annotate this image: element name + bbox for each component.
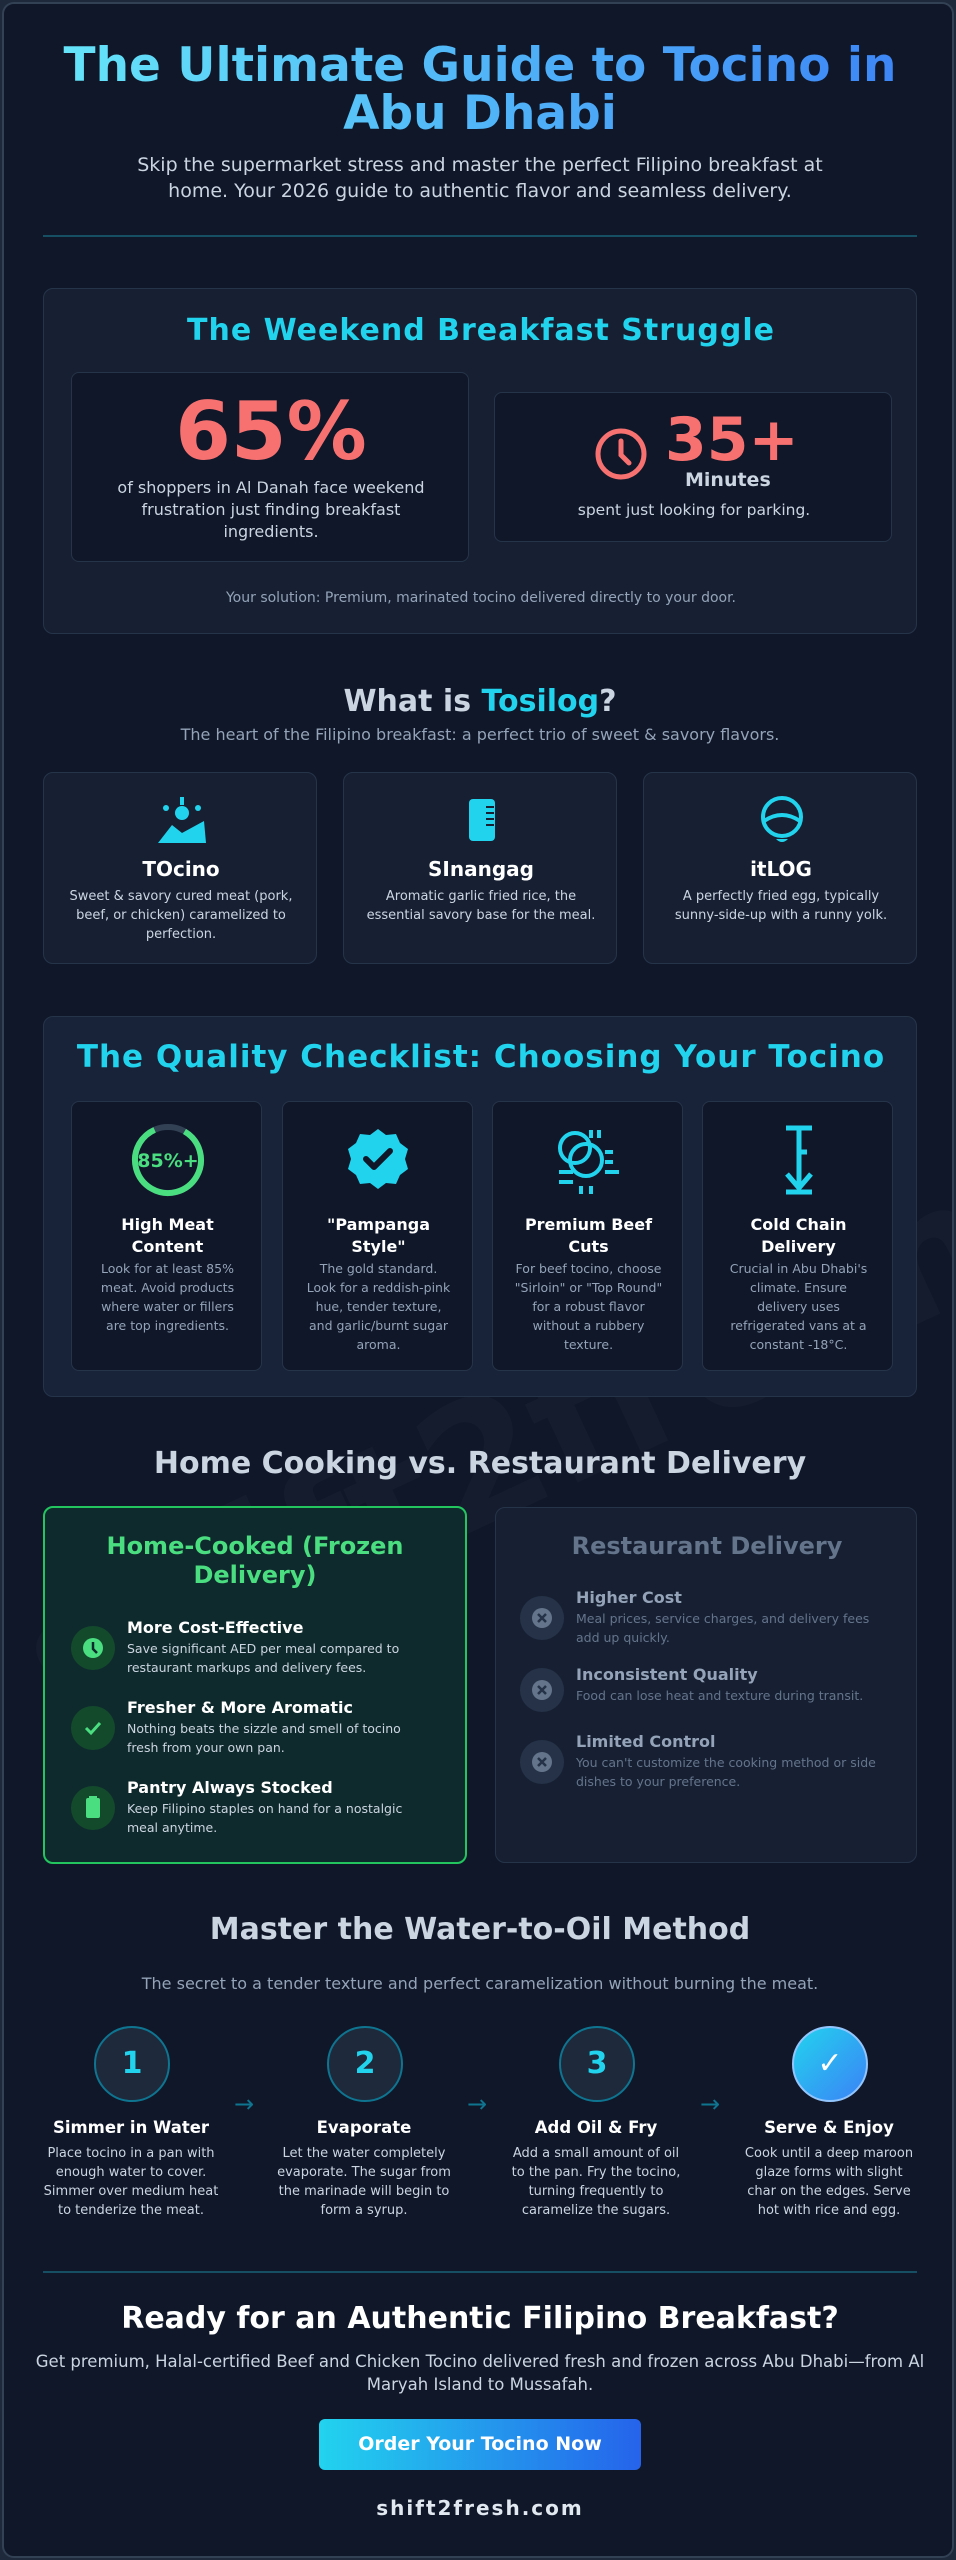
title: The Ultimate Guide to Tocino in [64,38,896,93]
card: high meat: Content [132,1237,203,1256]
button: order: Order Your Tocino Now [358,2433,602,2455]
card: high meat: High Meat [121,1215,214,1234]
item: pantry: Pantry Always Stocked [127,1778,333,1797]
step 3: 3 [587,2046,607,2081]
card: beef cuts: Premium Beef [525,1215,652,1234]
item: inconsistent: Food can lose heat and texture during transit. [576,1688,863,1703]
card: sinangag [343,772,617,964]
step 4: Cook until a deep maroon glaze forms with slight char on the edges. Serve hot with rice and egg. [745,2146,913,2218]
panel: home-cooked [43,1506,467,1864]
card: pampanga [282,1101,473,1371]
step 4 [745,2026,913,2218]
item: cost-effective: Save significant AED per meal compared to restaurant markups and delivery fees. [127,1641,399,1675]
item: inconsistent: Inconsistent Quality [576,1665,758,1684]
step 1 [44,2026,218,2218]
card: beef cuts [492,1101,683,1371]
heading: struggle: The Weekend Breakfast Struggle [187,313,775,348]
item: pantry [71,1778,402,1835]
card: tocino: Sweet & savory cured meat (pork, beef, or chicken) caramelized to perfection. [70,889,292,942]
heading: what is tosilog: What is Tosilog? [343,684,617,719]
panel: restaurant delivery: Restaurant Delivery [572,1532,842,1560]
step 2 [277,2026,451,2218]
card: high meat: Look for at least 85% meat. Avoid products where water or fillers are top ingredients. [101,1261,234,1333]
title: Abu Dhabi [343,86,617,141]
item: higher cost [520,1588,869,1645]
icon: rice [469,799,495,841]
step 3: Add Oil & Fry [535,2118,657,2137]
icon: cold arrow [785,1126,813,1194]
icon: egg [761,796,803,842]
card: sinangag: Aromatic garlic fried rice, the essential savory base for the meal. [367,889,595,923]
panel: home-cooked: Delivery) [193,1561,317,1589]
panel: home-cooked: Home-Cooked (Frozen [106,1532,404,1560]
card: cold chain: Delivery [761,1237,836,1256]
icon: 85% ring: 85%+ [137,1150,199,1172]
item: cost-effective: More Cost-Effective [127,1618,303,1637]
item: limited control [520,1732,876,1789]
item: higher cost: Meal prices, service charges, and delivery fees add up quickly. [576,1611,869,1645]
card: pampanga: Style" [351,1237,406,1256]
stat: 35+ minutes: spent just looking for parking. [578,501,810,519]
card: sinangag: SInangag [428,857,534,881]
step 4: Serve & Enjoy [764,2118,894,2137]
card: tocino: TOcino [142,857,220,881]
title [24,42,936,138]
icon: tocino [158,797,206,843]
card: beef cuts: For beef tocino, choose "Sirloin" or "Top Round" for a robust flavor without a rubbery texture. [515,1261,662,1352]
text: cta: Get premium, Halal-certified Beef and Chicken Tocino delivered fresh and frozen across Abu Dhabi—from Al Maryah Island to Mussafah. [36,2352,924,2394]
stat: 65%: 65% [175,385,367,478]
panel: restaurant delivery [495,1507,917,1863]
icon: clock [596,428,646,480]
card: tocino [43,772,317,964]
item: limited control: You can't customize the cooking method or side dishes to your preference. [576,1755,876,1789]
stat: 35+ minutes: Minutes [685,469,771,491]
card: itlog: itLOG [750,857,812,881]
item: fresher [71,1698,401,1755]
item: fresher: Nothing beats the sizzle and smell of tocino fresh from your own pan. [127,1721,401,1755]
stat: 65% [71,372,469,562]
panel: weekend struggle [43,288,917,634]
card: cold chain: Cold Chain [750,1215,847,1234]
item: inconsistent [520,1665,863,1712]
item: limited control: Limited Control [576,1732,716,1751]
step 1: Place tocino in a pan with enough water to cover. Simmer over medium heat to tenderize the meat. [44,2146,218,2218]
card: itlog: A perfectly fried egg, typically sunny-side-up with a runny yolk. [675,889,887,923]
heading: checklist: The Quality Checklist: Choosing Your Tocino [77,1039,885,1075]
arrow 1: → [234,2090,254,2118]
button: order [319,2419,641,2470]
stat: 65%: of shoppers in Al Danah face weekend frustration just finding breakfast ingredients. [117,478,425,541]
icon: badge check [348,1129,408,1189]
step 3: Add a small amount of oil to the pan. Fry the tocino, turning frequently to caramelize the sugars. [512,2146,680,2218]
stat: 35+ minutes [494,392,892,542]
card: pampanga: "Pampanga [327,1215,430,1234]
card: itlog [643,772,917,964]
text: solution: Your solution: Premium, marinated tocino delivered directly to your door. [226,590,736,606]
item: higher cost: Higher Cost [576,1588,682,1607]
panel: quality checklist [43,1016,917,1397]
heading: home vs restaurant: Home Cooking vs. Restaurant Delivery [154,1446,806,1481]
subtitle: tosilog: The heart of the Filipino breakfast: a perfect trio of sweet & savory flavors. [181,725,779,744]
icon: cuts [558,1130,619,1194]
card: cold chain: Crucial in Abu Dhabi's climate. Ensure delivery uses refrigerated vans at a constant -18°C. [730,1261,867,1352]
step 3 [512,2026,680,2218]
card: pampanga: The gold standard. Look for a reddish-pink hue, tender texture, and garlic/burnt sugar aroma. [307,1261,450,1352]
footer: url: shift2fresh.com [376,2496,584,2520]
arrow 3: → [700,2090,720,2118]
step 2: 2 [355,2046,375,2081]
subtitle: method: The secret to a tender texture and perfect caramelization without burning the meat. [142,1974,818,1993]
item: cost-effective [71,1618,399,1675]
card: high meat [71,1101,262,1371]
step 1: Simmer in Water [53,2118,209,2137]
step 2: Evaporate [317,2118,411,2137]
heading: method: Master the Water-to-Oil Method [210,1912,750,1947]
card: cold chain [702,1101,893,1371]
icon: 85% ring [132,1124,204,1196]
subtitle: Skip the supermarket stress and master the perfect Filipino breakfast at home. Your 2026 guide to authentic flavor and seamless delivery. [137,154,823,202]
card: beef cuts: Cuts [568,1237,609,1256]
item: fresher: Fresher & More Aromatic [127,1698,353,1717]
stat: 35+ minutes: 35+ [665,405,799,475]
step 1: 1 [122,2046,142,2081]
step 4: ✓ [817,2046,843,2081]
heading: cta: Ready for an Authentic Filipino Breakfast? [121,2301,839,2336]
arrow 2: → [467,2090,487,2118]
item: pantry: Keep Filipino staples on hand for a nostalgic meal anytime. [127,1801,402,1835]
step 2: Let the water completely evaporate. The sugar from the marinade will begin to form a syrup. [277,2146,451,2218]
